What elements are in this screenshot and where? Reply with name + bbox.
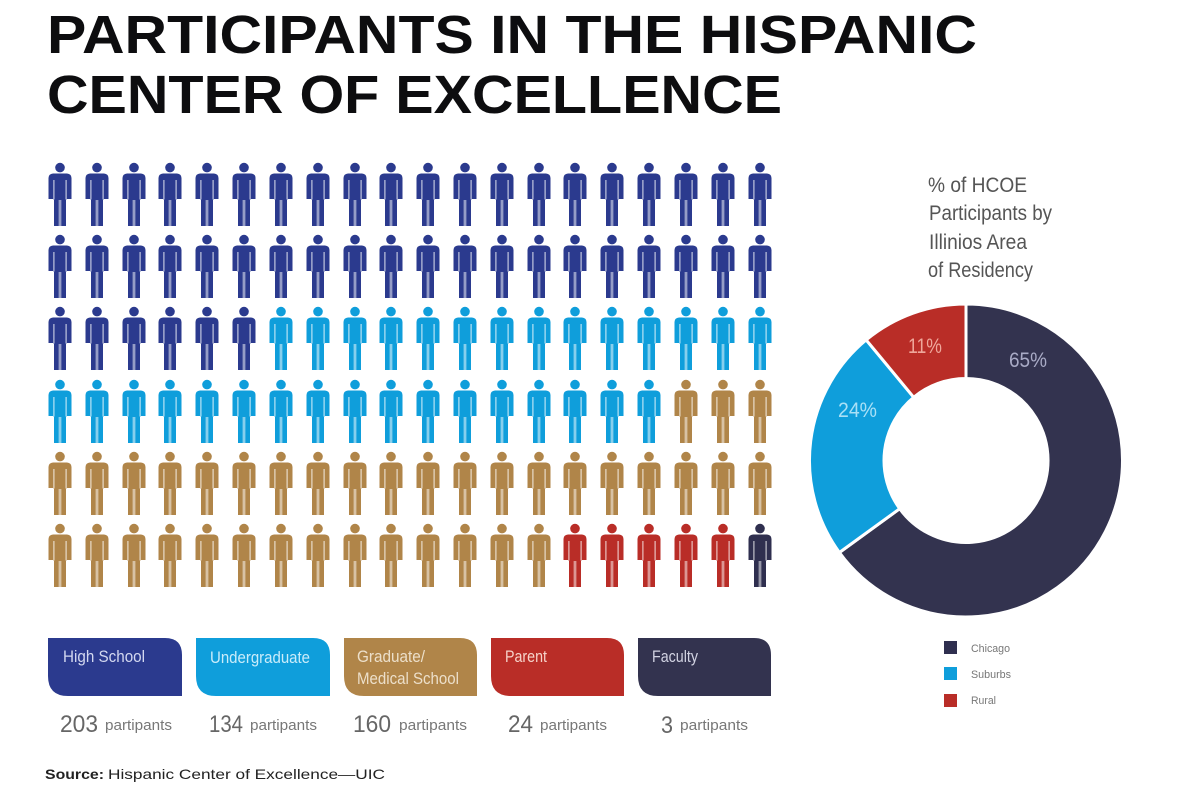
donut legend: [944, 641, 1011, 707]
donut chart heading: of Residency: [928, 259, 1033, 282]
row 4: undergraduate and graduate: [48, 380, 772, 443]
source note: Source:: [45, 766, 104, 782]
legend: undergraduate: 134: [209, 711, 243, 738]
legend: graduate / medical school: [344, 638, 477, 738]
segment: Chicago 65%: [839, 304, 1123, 617]
donut chart heading: [928, 174, 1052, 282]
legend: graduate / medical school: Medical School: [357, 669, 459, 688]
legend: graduate / medical school: 160: [353, 711, 391, 738]
legend: undergraduate: Undergraduate: [210, 648, 310, 667]
row 2: high school: [48, 235, 772, 298]
legend: high school: High School: [63, 647, 145, 666]
row 5: graduate: [48, 452, 772, 515]
legend: graduate / medical school: partipants: [399, 717, 467, 734]
row 6: graduate, parent and faculty: [48, 524, 772, 587]
row 3: high school and undergraduate: [48, 307, 772, 370]
donut chart heading: Illinios Area: [929, 231, 1027, 254]
legend: parent: partipants: [540, 717, 607, 734]
legend: parent: 24: [508, 711, 533, 738]
legend: parent: [491, 638, 624, 738]
legend item: Chicago: Chicago: [971, 643, 1010, 655]
legend: faculty: [638, 638, 771, 739]
donut chart heading: Participants by: [929, 202, 1052, 225]
title: PARTICIPANTS IN THE HISPANIC: [47, 5, 977, 65]
title: [47, 5, 977, 125]
donut percentage labels: 11%: [908, 335, 942, 358]
legend: graduate / medical school: Graduate/: [357, 647, 425, 666]
source note: Hispanic Center of Excellence—UIC: [108, 766, 385, 782]
legend item: Suburbs: Suburbs: [971, 669, 1011, 681]
legend: faculty: Faculty: [652, 647, 698, 666]
legend item: Rural: Rural: [971, 695, 996, 707]
pictogram chart: one figure per participant group unit: [48, 163, 772, 587]
segment: Rural 11%: [866, 304, 966, 397]
row 1: high school: [48, 163, 772, 226]
legend: parent: Parent: [505, 647, 547, 666]
donut percentage labels: [838, 335, 1047, 422]
legend: high school: 203: [60, 711, 98, 738]
segment: Suburbs 24%: [809, 340, 914, 552]
donut chart: residency share: [809, 304, 1123, 617]
legend: high school: [48, 638, 182, 738]
donut percentage labels: 24%: [838, 399, 877, 422]
legend: faculty: 3: [661, 712, 673, 739]
source note: [45, 766, 385, 782]
legend: undergraduate: partipants: [250, 717, 317, 734]
donut chart heading: % of HCOE: [928, 174, 1027, 197]
legend: high school: partipants: [105, 717, 172, 734]
legend: faculty: partipants: [680, 717, 748, 734]
title: CENTER OF EXCELLENCE: [47, 65, 782, 125]
legend: undergraduate: [196, 638, 330, 738]
donut percentage labels: 65%: [1009, 349, 1047, 372]
